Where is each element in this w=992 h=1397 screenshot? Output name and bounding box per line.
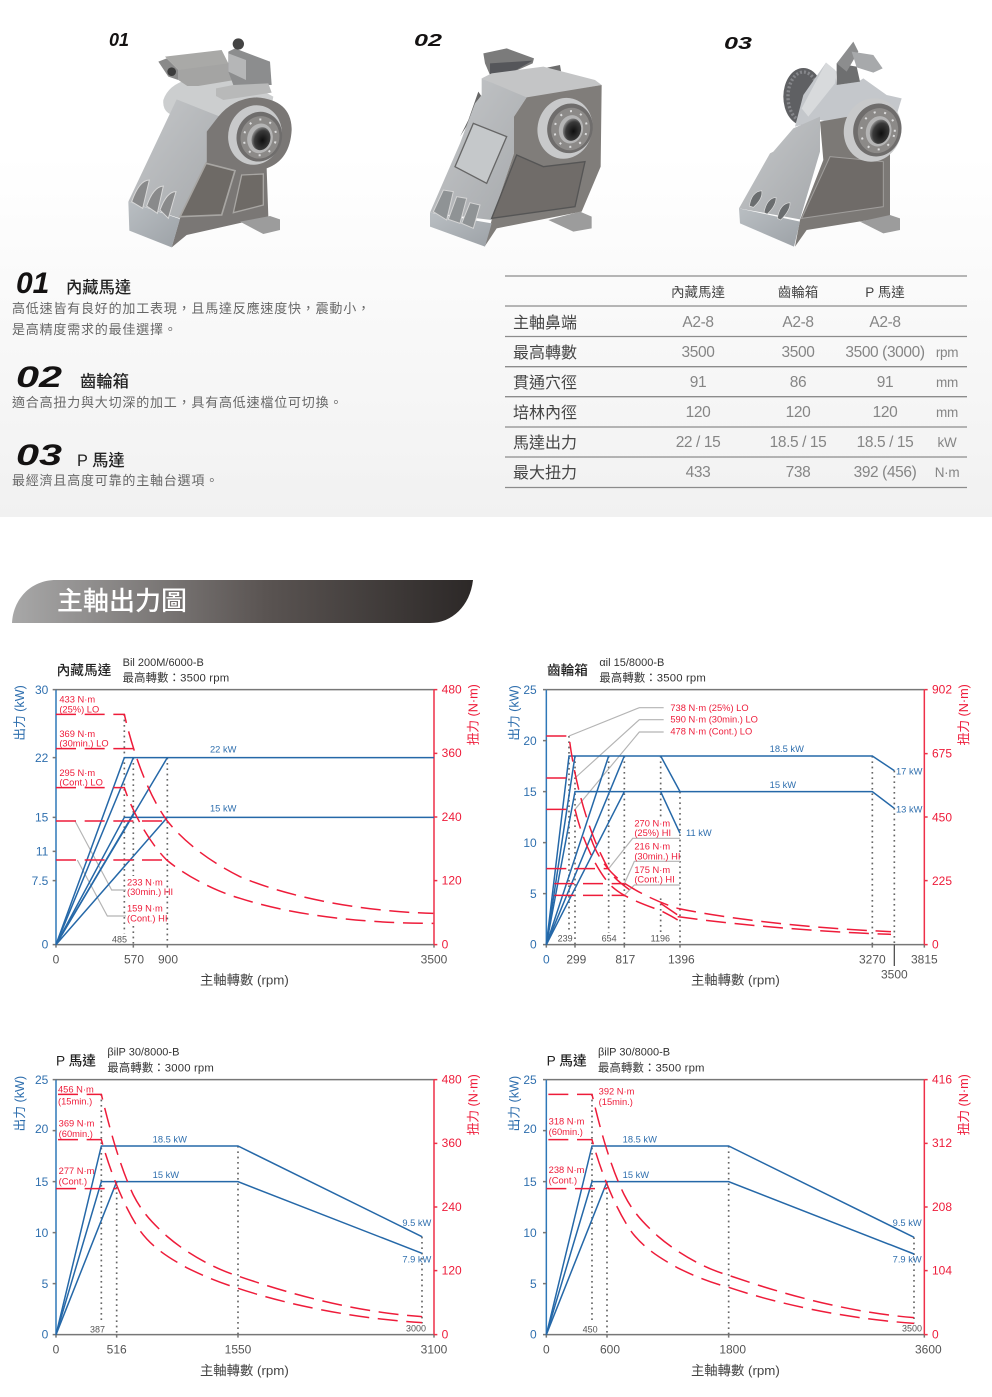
chart 1 annotations: 159 N·m [127,904,163,914]
chart 4 axes [543,1080,928,1338]
chart 2 power curves: 13 kW [896,804,923,814]
table header row: 內藏馬達 [671,285,725,300]
section banner: 主軸出力圖 [57,586,187,616]
chart 2 annotations: 738 N·m (25%) LO [670,703,749,713]
chart 2 header [547,657,706,685]
chart 1 annotations: (30min.) HI [127,887,173,897]
chart 4 header [547,1047,705,1075]
chart 3 annotations: (Cont.) [59,1176,87,1186]
product photo 02: gearbox headstock [430,48,602,247]
feature 01: 01 [16,267,49,300]
chart 3 annotations: (60min.) [59,1129,93,1139]
chart 2 power curves [546,744,923,945]
chart 4 axis labels: 10 [523,1226,537,1240]
chart 1 axis labels: 0 [42,938,49,952]
chart 2 annotations: 216 N·m [634,842,670,852]
chart 2 annotations: (30min.) HI [634,851,680,861]
chart 1 torque curves [56,714,433,923]
chart 1 axis labels: 360 [442,746,462,760]
chart 1 axis labels: 扭力 (N·m) [467,684,481,745]
row: motor output: kW [938,435,957,450]
chart 2 axis labels: 817 [615,952,636,966]
chart 1 header: 內藏馬達 [57,663,112,678]
chart 2 axis labels: 0 [530,938,537,952]
row: max speed: rpm [936,345,958,360]
chart 4 axis labels: 15 [523,1175,537,1189]
chart 1 header: Bil 200M/6000-B [123,657,204,669]
chart 1 axis labels: 15 [35,811,49,825]
chart 3 annotations: 387 [90,1324,105,1334]
row: max speed: 最高轉數 [513,344,577,362]
chart 4 axis labels: 208 [932,1200,952,1214]
chart 1 axis labels: 900 [158,952,178,966]
chart 2 axis labels: 5 [530,887,537,901]
chart 1 axis labels: 3500 [421,952,448,966]
chart 3 header: βilP 30/8000-B [107,1047,179,1059]
chart 2 annotations: 590 N·m (30min.) LO [670,715,758,725]
chart 2 guide lines [569,708,894,945]
chart 4 header: 最高轉數：3500 rpm [598,1061,705,1075]
chart 2 axis labels: 15 [523,785,537,799]
chart 1 axis labels: 11 [36,845,49,859]
chart 2 axis labels: 3500 [881,967,908,981]
table header row: 齒輪箱 [778,284,818,300]
chart 1 annotations: 295 N·m [59,768,95,778]
chart 4: P motor 3500 rpm [508,1047,971,1378]
chart 2 axis labels: 25 [523,683,537,697]
chart 4 guide lines [592,1094,914,1335]
chart 4 annotations: 450 [583,1324,598,1334]
chart 1 header: 最高轉數：3500 rpm [123,671,229,685]
chart 4 axis labels: 出力 (kW) [508,1076,522,1131]
chart 3 axes [53,1080,437,1338]
chart 1: built-in motor [13,657,481,987]
chart 2 axis labels: 10 [523,836,537,850]
row: spindle nose: A2-8 [682,314,714,331]
chart 3 axis labels: 1550 [225,1342,252,1356]
row: through hole: 91 [690,374,706,391]
feature 01 [12,267,371,337]
feature 03 [12,438,219,488]
row: bearing bore [513,404,958,422]
chart 3 torque curves [56,1094,422,1323]
row: max speed: 3500 [682,344,715,361]
chart 3 power curves: 7.9 kW [402,1255,432,1265]
chart 4 annotations: (15min.) [599,1097,633,1107]
chart 3: P motor 3000 rpm [13,1047,481,1378]
chart 1 axis labels: 出力 (kW) [13,685,27,741]
chart 4 annotations: 3500 [902,1324,922,1334]
chart 4 power curves: 7.9 kW [893,1255,922,1265]
chart 2 annotations: 239 [558,934,573,944]
chart 1 axis labels: 主軸轉數 (rpm) [200,972,289,987]
feature 03: P 馬達 [77,452,125,470]
chart 2 axis labels: 3270 [859,952,886,966]
chart 3 power curves [56,1134,432,1335]
chart 3 annotations: 456 N·m [58,1085,94,1095]
chart 4 axis labels: 0 [530,1328,537,1342]
row: max torque: 738 [786,464,810,481]
chart 4 annotations: (Cont.) [549,1176,577,1186]
chart 3 axis labels: 主軸轉數 (rpm) [200,1363,289,1378]
row: bearing bore: mm [936,405,958,420]
chart 2: gearbox [508,657,971,987]
chart 1 annotations [59,695,173,945]
row: spindle nose: A2-8 [869,314,901,331]
chart 1 power curves: 15 kW [210,804,237,814]
chart 2 axis labels: 20 [523,734,537,748]
chart 1 axis labels: 480 [442,683,462,697]
chart 4 axis labels: 1800 [719,1342,746,1356]
chart 1 power curves: 22 kW [210,745,237,755]
chart 4 power curves: 15 kW [623,1170,649,1180]
chart 3 axis labels [13,1073,481,1378]
feature 03: 最經濟且高度可靠的主軸台選項。 [12,473,219,488]
chart 1 annotations: (30min.) LO [59,739,109,749]
chart 2 axis labels [508,683,971,987]
row: through hole: 貫通穴徑 [513,374,577,392]
row: max torque: 392 (456) [854,464,917,481]
chart 4 torque curves [546,1094,914,1323]
row: motor output: 18.5 / 15 [770,434,826,451]
chart 4 power curves: 9.5 kW [893,1218,922,1228]
chart 1 axis labels: 240 [442,810,462,824]
chart 2 axis labels: 902 [932,683,952,697]
chart 4 annotations [549,1086,922,1334]
chart 4 axis labels: 0 [932,1327,939,1341]
feature 01: 是高精度需求的最佳選擇。 [12,322,178,337]
chart 3 annotations: 277 N·m [59,1166,95,1176]
row: motor output [513,434,957,452]
chart 1 axes [53,690,437,948]
chart 4 axis labels: 104 [932,1264,952,1278]
feature 01: 內藏馬達 [66,279,131,297]
chart 3 power curves: 18.5 kW [153,1134,187,1144]
chart 3 header [56,1047,214,1075]
row: through hole: mm [936,375,958,390]
chart 1 guide lines [75,714,167,945]
chart 4 axis labels: 600 [600,1342,620,1356]
chart 2 annotations: 654 [602,934,617,944]
row: bearing bore: 120 [873,404,898,421]
row: bearing bore: 120 [686,404,711,421]
chart 2 power curves: 15 kW [770,780,796,790]
chart 3 axis labels: 5 [42,1277,49,1291]
row: through hole: 86 [790,374,806,391]
chart 3 annotations: (15min.) [58,1097,92,1107]
chart 2 axes [543,690,928,966]
feature 01: 高低速皆有良好的加工表現，且馬達反應速度快，震動小， [12,301,371,316]
chart 2 annotations: 1196 [651,934,670,944]
chart 1 axis labels [13,683,481,987]
chart 4 header: P 馬達 [547,1053,587,1068]
chart 3 axis labels: 0 [442,1327,449,1341]
chart 2 header: αil 15/8000-B [599,657,664,669]
chart 2 annotations: 270 N·m [634,818,670,828]
chart 3 annotations: 3000 [406,1324,426,1334]
chart 3 axis labels: 120 [442,1264,462,1278]
chart 4 axis labels: 416 [932,1072,952,1086]
chart 1 power curves [56,745,434,945]
photo number 01: 01 [109,30,129,50]
chart 2 annotations: 175 N·m [634,865,670,875]
chart 1 axis labels: 0 [53,952,60,966]
specification table [505,276,967,488]
chart 1 annotations: 433 N·m [59,695,95,705]
chart 2 header: 齒輪箱 [547,662,588,678]
chart 3 header: 最高轉數：3000 rpm [107,1061,214,1075]
chart 3 power curves: 15 kW [153,1170,179,1180]
row: max speed: 3500 (3000) [845,344,925,361]
feature 03: 03 [16,438,62,472]
feature 02: 適合高扭力與大切深的加工，具有高低速檔位可切換。 [12,395,343,410]
chart 3 axis labels: 0 [42,1328,49,1342]
section banner [12,580,473,623]
chart 2 annotations: (Cont.) HI [634,875,675,885]
chart 2 power curves: 11 kW [686,828,712,838]
chart 2 annotations [558,703,758,944]
chart 4 axis labels: 25 [523,1073,537,1087]
table header row: P 馬達 [865,285,905,300]
chart 3 power curves: 9.5 kW [402,1218,432,1228]
chart 3 axis labels: 25 [35,1073,49,1087]
chart 4 annotations: 318 N·m [549,1116,585,1126]
chart 1 annotations: 233 N·m [127,877,163,887]
chart 4 annotations: 392 N·m [599,1086,635,1096]
chart 1 axis labels: 7.5 [32,874,49,888]
top background panel [0,0,992,517]
chart 4 axis labels: 0 [543,1342,550,1356]
row: max speed: 3500 [782,344,815,361]
row: through hole [513,374,958,392]
chart 4 axis labels: 5 [530,1277,537,1291]
chart 4 power curves [546,1134,922,1335]
chart 4 axis labels: 312 [932,1136,952,1150]
chart 3 axis labels: 3100 [421,1342,448,1356]
row: motor output: 18.5 / 15 [857,434,913,451]
chart 4 axis labels [508,1072,971,1378]
product photo 01: built-in motor headstock [128,38,292,247]
chart 2 axis labels: 675 [932,747,952,761]
chart 1 annotations: 369 N·m [59,729,95,739]
table header row [671,284,905,300]
chart 3 axis labels: 480 [442,1073,462,1087]
chart 2 axis labels: 1396 [668,952,695,966]
chart 4 axis labels: 扭力 (N·m) [957,1074,971,1135]
chart 4 header: βilP 30/8000-B [598,1047,670,1059]
feature 02: 齒輪箱 [80,372,129,391]
chart 4 axis labels: 主軸轉數 (rpm) [691,1363,780,1378]
chart 2 axis labels: 450 [932,810,952,824]
chart 2 power curves: 18.5 kW [770,744,804,754]
row: max torque: N·m [935,465,959,480]
chart 2 annotations: 478 N·m (Cont.) LO [670,727,752,737]
feature list [12,267,371,488]
chart 3 axis labels: 0 [53,1342,60,1356]
chart 1 annotations: (Cont.) LO [59,778,103,788]
chart 2 axis labels: 0 [932,937,939,951]
chart 3 annotations: 369 N·m [59,1119,95,1129]
chart 1 annotations: (Cont.) HI [127,914,167,924]
chart 3 header: P 馬達 [56,1053,96,1068]
chart 4 axis labels: 20 [523,1122,537,1136]
chart 3 axis labels: 20 [35,1122,49,1136]
chart 1 axis labels: 570 [124,952,144,966]
chart 2 axis labels: 出力 (kW) [508,685,522,741]
row: max torque: 最大扭力 [513,464,577,482]
chart 2 power curves: 17 kW [896,767,923,777]
row: bearing bore: 120 [786,404,811,421]
chart 1 axis labels: 0 [442,937,449,951]
chart 3 axis labels: 15 [35,1175,49,1189]
chart 1 axis labels: 30 [35,683,49,697]
chart 1 annotations: (25%) LO [59,704,99,714]
chart 2 annotations: (25%) HI [634,828,671,838]
row: motor output: 馬達出力 [513,434,577,452]
row: motor output: 22 / 15 [676,434,720,451]
chart 2 axis labels: 主軸轉數 (rpm) [691,972,780,987]
chart 3 guide lines [101,1094,422,1335]
chart 3 axis labels: 出力 (kW) [13,1076,27,1131]
row: spindle nose: 主軸鼻端 [513,314,577,332]
photo number 02: 02 [414,30,442,50]
row: spindle nose: A2-8 [782,314,814,331]
chart 4 annotations: (60min.) [549,1127,583,1137]
chart 3 annotations [58,1085,426,1334]
chart 1 axis labels: 22 [35,751,49,765]
chart 2 axis labels: 0 [543,952,550,966]
chart 2 axis labels: 3815 [911,952,938,966]
chart 2 header: 最高轉數：3500 rpm [599,671,706,685]
chart 3 axis labels: 240 [442,1200,462,1214]
row: max torque [513,464,959,482]
chart 3 axis labels: 360 [442,1136,462,1150]
chart 3 axis labels: 10 [35,1226,49,1240]
chart 2 torque curves [546,736,891,934]
chart 1 annotations: 485 [112,935,127,945]
chart 4 axis labels: 3600 [915,1342,942,1356]
chart 3 axis labels: 516 [107,1342,127,1356]
photo number 03: 03 [724,33,752,53]
chart 4 power curves: 18.5 kW [623,1134,657,1144]
chart 2 axis labels: 299 [566,952,587,966]
chart 3 axis labels: 扭力 (N·m) [467,1074,481,1135]
chart 1 axis labels: 120 [442,874,462,888]
row: spindle nose [513,314,901,332]
product photo 03: P motor headstock [739,42,909,247]
row: through hole: 91 [877,374,893,391]
feature 02 [12,360,343,410]
chart 2 axis labels: 扭力 (N·m) [957,684,971,745]
chart 2 axis labels: 225 [932,874,952,888]
row: bearing bore: 培林內徑 [513,404,577,422]
chart 4 annotations: 238 N·m [549,1165,585,1175]
row: max speed [513,344,958,362]
chart 1 header [57,657,229,685]
feature 02: 02 [16,360,62,394]
row: max torque: 433 [686,464,710,481]
